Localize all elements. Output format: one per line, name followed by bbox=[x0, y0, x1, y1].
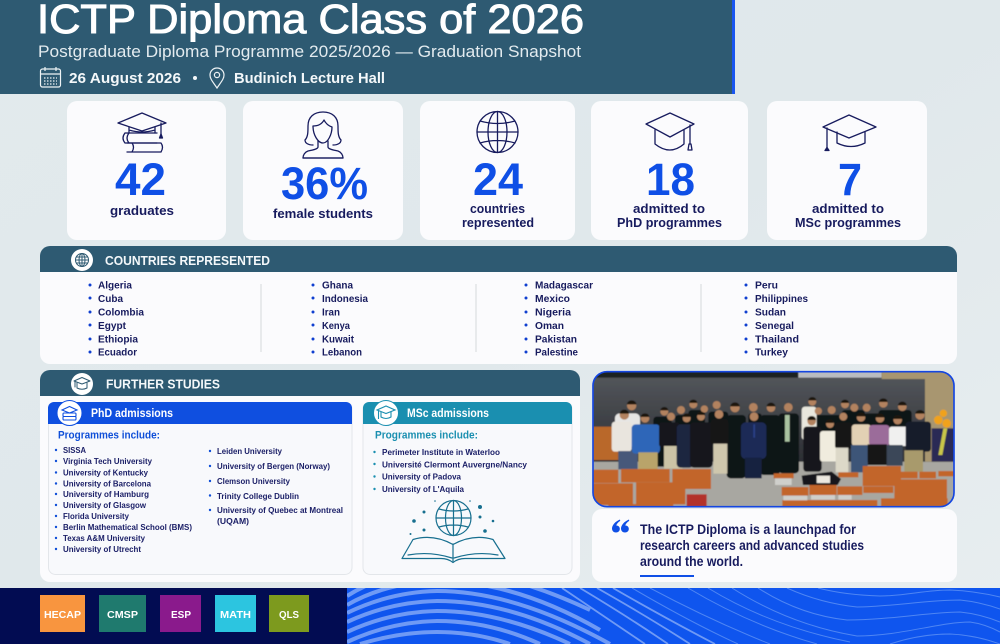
icon: cap badge bbox=[374, 400, 398, 426]
country list column 2: Kuwait bbox=[322, 334, 354, 346]
heading: COUNTRIES REPRESENTED bbox=[105, 254, 270, 268]
panel: further studies bbox=[40, 370, 580, 582]
country list column 4: Thailand bbox=[755, 334, 799, 346]
label bbox=[617, 201, 722, 230]
label: graduates bbox=[110, 203, 174, 218]
PhD list column 1: Texas A&M University bbox=[63, 533, 145, 543]
MSc list: Perimeter Institute in Waterloo bbox=[382, 447, 500, 457]
quote text: The ICTP Diploma is a launchpad for bbox=[640, 522, 857, 537]
PhD list column 1: SISSA bbox=[63, 445, 86, 455]
panel: countries represented bbox=[40, 246, 957, 364]
PhD list column 2: Clemson University bbox=[217, 476, 290, 486]
quote card bbox=[592, 509, 957, 582]
PhD list column 2: (UQAM) bbox=[217, 516, 249, 526]
programmes include label: Programmes include: bbox=[375, 430, 478, 442]
lecture hall seats bbox=[593, 466, 954, 507]
stat card: graduates bbox=[67, 101, 226, 240]
icon: globe bbox=[477, 112, 518, 152]
stat card: countries bbox=[420, 101, 575, 240]
tag: CMSP bbox=[99, 595, 146, 632]
icon: graduation cap bbox=[646, 113, 694, 150]
tag: QLS bbox=[269, 595, 309, 632]
country list column 3: Nigeria bbox=[535, 306, 571, 318]
PhD list column 2 bbox=[209, 446, 343, 526]
group photo bbox=[593, 372, 954, 507]
icon: globe over open book bbox=[402, 500, 505, 562]
stat card: female students bbox=[243, 101, 403, 240]
PhD list column 1: University of Utrecht bbox=[63, 544, 141, 554]
label: admitted to bbox=[812, 201, 884, 216]
icon: cap and books bbox=[118, 113, 166, 152]
country list column 1: Egypt bbox=[98, 320, 126, 332]
footer: subject tags bbox=[0, 588, 347, 644]
icon: books badge bbox=[57, 400, 82, 426]
label: countries bbox=[470, 201, 525, 216]
country list column 1: Colombia bbox=[98, 306, 144, 318]
subtitle: Postgraduate Diploma Programme 2025/2026 — Graduation Snapshot bbox=[38, 42, 581, 61]
programmes include label: Programmes include: bbox=[58, 430, 160, 442]
date: 26 August 2026 bbox=[69, 71, 181, 87]
country list column 3: Madagascar bbox=[535, 280, 593, 292]
country list column 4: Turkey bbox=[755, 346, 788, 358]
quote text bbox=[640, 522, 864, 569]
country list column 3: Mexico bbox=[535, 293, 570, 305]
label bbox=[462, 201, 534, 230]
icon: woman bbox=[303, 112, 343, 158]
label: MSc programmes bbox=[795, 215, 901, 230]
venue: Budinich Lecture Hall bbox=[234, 71, 385, 87]
country list column 3: Oman bbox=[535, 320, 564, 332]
country list column 2: Kenya bbox=[322, 320, 350, 332]
country list column 1: Ethiopia bbox=[98, 334, 138, 346]
number: 18 bbox=[646, 154, 695, 205]
MSc list bbox=[373, 447, 527, 494]
country list column 2: Iran bbox=[322, 306, 340, 318]
PhD list column 1: Berlin Mathematical School (BMS) bbox=[63, 522, 192, 532]
people bbox=[612, 397, 931, 478]
PhD list column 1: Virginia Tech University bbox=[63, 456, 152, 466]
quote text: around the world. bbox=[640, 554, 743, 569]
tag: QLS: QLS bbox=[279, 609, 299, 621]
stat card: PhD admissions bbox=[591, 101, 748, 240]
PhD list column 2: Leiden University bbox=[217, 446, 282, 456]
sub-heading: PhD admissions bbox=[91, 408, 173, 420]
country list column 3: Palestine bbox=[535, 346, 578, 358]
country list column 4: Senegal bbox=[755, 320, 794, 332]
country list column 2 bbox=[312, 280, 368, 358]
sub-panel: MSc admissions bbox=[363, 400, 572, 574]
tag: HECAP: HECAP bbox=[44, 609, 81, 621]
label: admitted to bbox=[633, 201, 705, 216]
PhD list column 1: Florida University bbox=[63, 511, 129, 521]
number: 7 bbox=[838, 154, 862, 205]
PhD list column 2: University of Bergen (Norway) bbox=[217, 461, 330, 471]
number: 24 bbox=[473, 154, 523, 205]
icon: cap badge bbox=[71, 373, 93, 395]
number: 36% bbox=[281, 158, 368, 209]
country list column 1: Cuba bbox=[98, 293, 123, 305]
label: female students bbox=[273, 206, 373, 221]
country list column 3: Pakistan bbox=[535, 334, 577, 346]
sub-panel: PhD admissions bbox=[48, 400, 352, 574]
footer: blue wave pattern bbox=[347, 588, 1000, 644]
header banner bbox=[0, 0, 735, 94]
PhD list column 1: University of Barcelona bbox=[63, 478, 151, 488]
quote text: research careers and advanced studies bbox=[640, 538, 864, 553]
country list column 1 bbox=[88, 280, 144, 358]
tag: MATH: MATH bbox=[220, 609, 251, 621]
label: PhD programmes bbox=[617, 215, 722, 230]
icon: graduation cap bbox=[823, 115, 876, 150]
MSc list: Université Clermont Auvergne/Nancy bbox=[382, 460, 527, 470]
heading: FURTHER STUDIES bbox=[106, 378, 220, 392]
label: represented bbox=[462, 215, 534, 230]
country list column 2: Indonesia bbox=[322, 293, 368, 305]
country list column 2: Lebanon bbox=[322, 346, 362, 358]
PhD list column 2: University of Quebec at Montreal bbox=[217, 505, 343, 515]
tag: HECAP bbox=[40, 595, 85, 632]
country list column 2: Ghana bbox=[322, 280, 353, 292]
country list column 3 bbox=[524, 280, 593, 358]
country list column 4: Philippines bbox=[755, 293, 808, 305]
quotation mark bbox=[612, 520, 629, 532]
PhD list column 1: University of Glasgow bbox=[63, 500, 146, 510]
label bbox=[795, 201, 901, 230]
separator dot bbox=[193, 76, 197, 80]
PhD list column 1 bbox=[55, 445, 192, 554]
MSc list: University of Padova bbox=[382, 472, 461, 482]
number: 42 bbox=[115, 154, 166, 205]
tag: CMSP: CMSP bbox=[107, 609, 138, 621]
icon: globe badge bbox=[71, 249, 93, 271]
country list column 1: Ecuador bbox=[98, 346, 137, 358]
PhD list column 2: Trinity College Dublin bbox=[217, 491, 299, 501]
PhD list column 1: University of Kentucky bbox=[63, 468, 148, 478]
sub-heading: MSc admissions bbox=[407, 408, 489, 420]
tag: ESP: ESP bbox=[171, 609, 191, 621]
country list column 4: Sudan bbox=[755, 306, 786, 318]
tag: MATH bbox=[215, 595, 256, 632]
tag: ESP bbox=[160, 595, 201, 632]
MSc list: University of L'Aquila bbox=[382, 484, 464, 494]
country list column 1: Algeria bbox=[98, 280, 132, 292]
PhD list column 1: University of Hamburg bbox=[63, 489, 149, 499]
stat card: MSc admissions bbox=[767, 101, 927, 240]
icon: location pin bbox=[210, 68, 224, 88]
country list column 4: Peru bbox=[755, 280, 778, 292]
icon: calendar bbox=[40, 67, 60, 87]
country list column 4 bbox=[744, 280, 808, 358]
